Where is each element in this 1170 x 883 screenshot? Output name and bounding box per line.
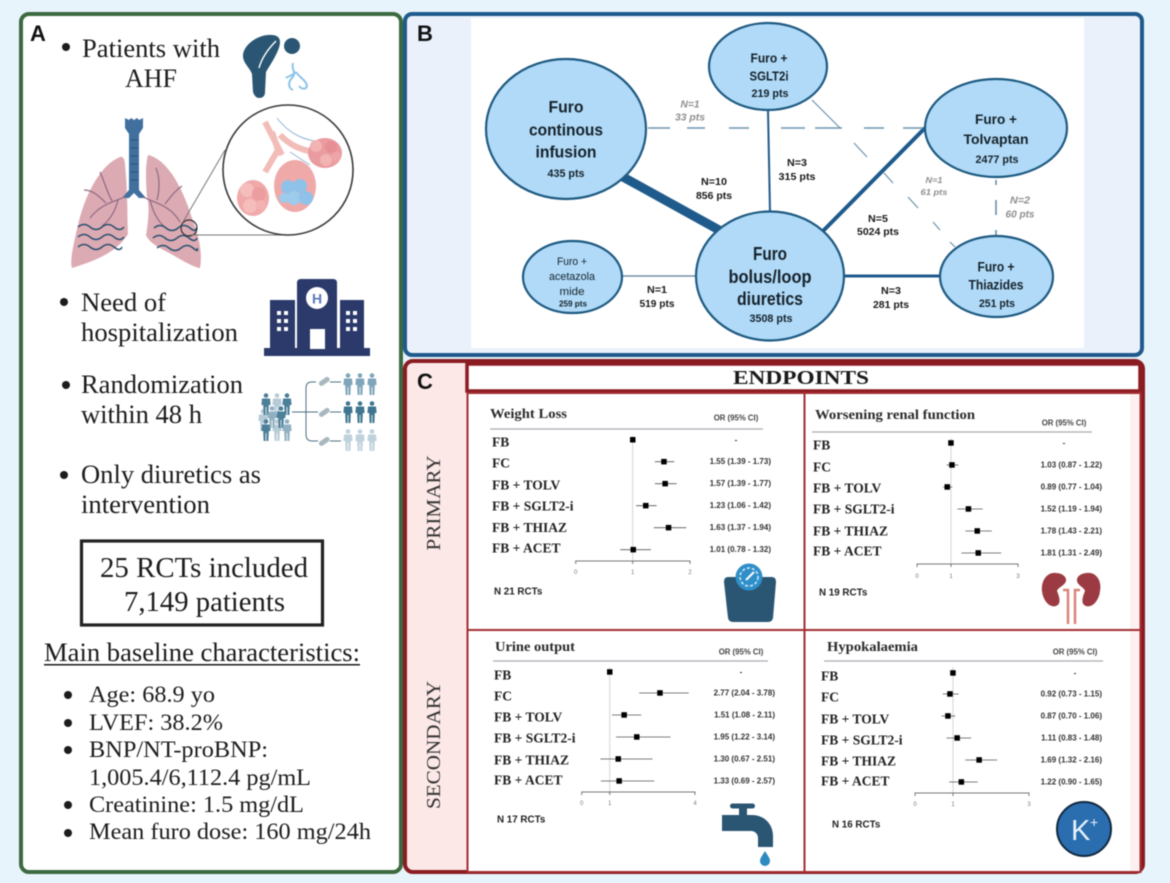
row: FB + SGLT2-i: FB + SGLT2-i [821,732,903,748]
node: furo continuous infusion: infusion [536,142,596,162]
edge labels: 519 pts [640,298,675,310]
list: baseline values [64,682,371,845]
icon: potassium K+: K [1071,815,1091,847]
row: FC [494,688,775,704]
row: FB + SGLT2-i: 1.95 (1.22 - 3.14) [714,732,775,742]
forest plot: weight loss: 2 [688,570,692,576]
node: furo plus tolvaptan [925,79,1067,177]
row: FB + SGLT2-i [494,730,775,746]
row: FB: - [1074,668,1077,678]
row: FC: FC [492,456,510,470]
node: furo continuous infusion: continous [529,120,603,140]
row: FB: FB [813,438,830,452]
row: FB + SGLT2-i: 1.11 (0.83 - 1.48) [1041,734,1102,742]
callout: included trials: 25 RCTs included [100,553,308,584]
node: furo plus acetazolamide [523,241,622,313]
panel B: treatment network [405,14,1142,355]
forest plot: worsening renal function: 0 [915,574,919,580]
forest plot: worsening renal function: 3 [1016,574,1020,580]
forest plot: urine output: OR (95% CI) [719,648,764,656]
edge labels: 61 pts [920,187,948,197]
edge labels: N=10 [701,176,727,188]
forest plot: weight loss: Weight Loss [490,407,568,422]
row: FB + TOLV: 0.87 (0.70 - 1.06) [1041,712,1102,720]
node: furo plus tolvaptan: 2477 pts [976,154,1018,166]
row: FB: FB [821,668,838,684]
row: FB [494,668,743,682]
node: furo continuous infusion: Furo [548,98,584,116]
forest plot: hypokalaemia: Hypokalaemia [827,640,918,655]
row: FB + ACET: 1.22 (0.90 - 1.65) [1041,778,1102,786]
row: FB: FB [494,668,511,682]
row: FB + SGLT2-i [821,732,1102,748]
callout: included trials: 7,149 patients [124,587,285,618]
row: FB + TOLV: FB + TOLV [813,480,881,496]
row: FB [821,668,1077,684]
row: FB + TOLV: FB + TOLV [821,712,889,726]
node: furo plus acetazolamide: Furo + [557,256,587,268]
row: FB + SGLT2-i: 1.52 (1.19 - 1.94) [1041,504,1102,514]
row: FB + SGLT2-i: FB + SGLT2-i [813,502,895,516]
node: furo plus acetazolamide: 259 pts [559,300,588,308]
bullet: randomization within 48 h: Randomization [81,370,243,399]
row: FB + TOLV [492,478,771,492]
row: FB + ACET [813,544,1102,558]
forest plot: urine output [468,630,804,872]
row: FC: FC [813,460,831,474]
edge labels [640,100,1035,311]
forest plot: hypokalaemia: OR (95% CI) [1053,648,1098,656]
row: FB + TOLV: FB + TOLV [494,710,562,724]
forest plot: hypokalaemia: 3 [1027,802,1031,808]
node: furo bolus loop diuretics: Furo [753,244,787,264]
note: trial count: N 16 RCTs [832,820,881,830]
row: FB + THIAZ: 1.78 (1.43 - 2.21) [1041,526,1102,536]
row: FB + THIAZ [821,754,1102,768]
bullet: need of hospitalization: hospitalization [81,318,238,347]
node: furo plus SGLT2i [709,23,827,110]
row: FB + THIAZ: FB + THIAZ [492,520,567,535]
forest plot: urine output: Urine output [495,640,575,655]
node: furo plus thiazides: Furo + [978,260,1015,274]
row: FB + THIAZ: FB + THIAZ [494,752,569,768]
row: FC: 1.03 (0.87 - 1.22) [1041,460,1102,470]
edge labels: N=2 [1010,196,1030,206]
illustration: alveoli magnified [223,105,353,235]
node: furo bolus loop diuretics: bolus/loop [728,267,812,287]
row: FB + THIAZ [494,752,775,768]
bullet: randomization within 48 h: within 48 h [81,400,202,429]
row: FC [821,690,1102,704]
bullet: patients with AHF: AHF [125,64,177,93]
row: FB + SGLT2-i: FB + SGLT2-i [494,730,576,746]
row: FB + THIAZ: FB + THIAZ [813,524,888,538]
forest plot: worsening renal function: 1 [949,574,953,580]
edge labels: 5024 pts [857,226,899,238]
row: FC: 2.77 (2.04 - 3.78) [714,688,775,698]
forest plot: urine output: 0 [580,801,584,807]
icon: randomization into arms [258,373,377,451]
row: FB + ACET: FB + ACET [821,774,889,788]
node: furo plus SGLT2i: SGLT2i [750,68,788,84]
edge labels: 315 pts [778,171,816,183]
note: trial count: N 17 RCTs [497,814,546,826]
row: FB + ACET: FB + ACET [492,540,560,556]
row: FB: FB [492,434,509,450]
edge labels: N=3 [881,285,901,297]
row: FB + ACET [492,540,771,556]
row: FB + THIAZ [492,520,771,535]
icon: coughing patient [243,35,307,98]
forest plot: worsening renal function [804,393,1140,630]
icon: potassium K+ [1057,802,1111,856]
list: baseline values: LVEF: 38.2% [89,710,223,736]
row: FB + ACET [821,774,1102,788]
illustration: lungs with pulmonary oedema [71,118,285,268]
edge labels: N=3 [787,157,807,169]
panel letter B: B [417,21,433,46]
row: FB: - [735,436,738,444]
row: FB + ACET: 1.81 (1.31 - 2.49) [1041,548,1102,558]
icon: hospital [264,279,370,356]
row: FB + SGLT2-i [813,502,1102,516]
panel letter A: A [30,21,46,46]
bullet: patients with AHF [62,34,220,93]
bullet: only diuretics as intervention: Only diuretics as [81,460,261,489]
row: FB: - [740,668,743,676]
heading: baseline characteristics: Main baseline characteristics: [44,637,360,667]
forest plot: worsening renal function: OR (95% CI) [1042,418,1087,428]
row label: primary: PRIMARY [423,456,445,550]
row: FB + SGLT2-i: 1.23 (1.06 - 1.42) [710,501,771,510]
row: FB + TOLV: 0.89 (0.77 - 1.04) [1041,482,1102,492]
node: furo plus thiazides: 251 pts [979,298,1015,310]
node: furo plus tolvaptan: Furo + [975,111,1017,127]
bullet: only diuretics as intervention [60,460,261,519]
bullet: need of hospitalization [60,288,238,347]
list: baseline values: Creatinine: 1.5 mg/dL [89,792,304,818]
node: furo plus SGLT2i: 219 pts [752,88,788,100]
row: FC: 0.92 (0.73 - 1.15) [1041,690,1102,698]
row: FB + TOLV: 1.57 (1.39 - 1.77) [710,479,771,488]
row: FC: 1.55 (1.39 - 1.73) [710,457,771,466]
list: baseline values: Mean furo dose: 160 mg/24h [89,819,371,845]
node: furo plus thiazides: Thiazides [968,278,1024,292]
row: FB + ACET [494,772,775,788]
callout: included trials [82,541,322,625]
row: FB [492,434,738,450]
panel A: population [21,14,401,872]
node: furo bolus loop diuretics [696,212,844,340]
row: FB + SGLT2-i [492,498,771,514]
row: FB + TOLV: FB + TOLV [492,478,560,492]
row: FB + TOLV [821,712,1102,726]
node: furo plus SGLT2i: Furo + [750,50,788,66]
forest plot: weight loss [468,393,804,630]
node: furo continuous infusion [486,59,646,199]
edge labels: 856 pts [696,190,732,202]
row label: secondary: SECONDARY [423,681,445,809]
row: FB + TOLV: 1.51 (1.08 - 2.11) [714,710,775,720]
forest plot: weight loss: 1 [631,570,635,576]
panel C: endpoints [405,361,1143,872]
icon: kidneys [1042,573,1100,624]
edge labels: 60 pts [1006,210,1035,220]
title: endpoints: ENDPOINTS [733,367,869,389]
edge labels: 33 pts [675,112,705,124]
row: FC [492,456,771,470]
forest plot: worsening renal function: Worsening renal function [815,408,975,423]
node: furo plus acetazolamide: acetazola [549,271,596,283]
row: FB + SGLT2-i: FB + SGLT2-i [492,498,574,514]
edge labels: N=5 [868,213,888,225]
node: furo plus thiazides [940,236,1053,317]
panel letter C: C [417,369,433,394]
edge labels: N=1 [926,175,943,185]
list: baseline values: Age: 68.9 yo [89,682,215,708]
row: FB + ACET: 1.01 (0.78 - 1.32) [710,545,771,554]
forest plot: hypokalaemia: 0 [913,802,917,808]
row: FB + THIAZ: 1.63 (1.37 - 1.94) [710,523,771,532]
note: trial count: N 19 RCTs [819,588,868,598]
row: FB + ACET: FB + ACET [494,772,562,788]
row: FB + THIAZ: 1.69 (1.32 - 2.16) [1041,756,1102,764]
forest plot: urine output: 4 [693,801,697,807]
row: FB + ACET: FB + ACET [813,544,881,558]
list: baseline values: 1,005.4/6,112.4 pg/mL [89,765,311,791]
network edges [622,100,996,276]
row: FB [813,438,1066,452]
icon: dripping tap [722,804,773,866]
bullet: randomization within 48 h [62,370,243,429]
bullet: need of hospitalization: Need of [81,288,166,317]
forest plot: weight loss: OR (95% CI) [714,414,759,422]
forest plot: hypokalaemia [804,630,1140,872]
row: FC: FC [821,690,839,704]
note: trial count: N 21 RCTs [494,586,543,598]
forest plot: urine output: 1 [608,801,612,807]
row: FC [813,460,1102,474]
row: FB + TOLV [813,480,1102,496]
row: FB + THIAZ: FB + THIAZ [821,754,896,768]
row: FB + TOLV [494,710,775,724]
forest plot: weight loss: 0 [574,570,578,576]
bullet: only diuretics as intervention: intervention [81,490,210,519]
node: furo bolus loop diuretics: 3508 pts [750,313,792,325]
forest plot: hypokalaemia: 1 [951,802,955,808]
row: FB + THIAZ [813,524,1102,538]
node: furo plus acetazolamide: mide [560,286,584,298]
row: FB + THIAZ: 1.30 (0.67 - 2.51) [714,754,775,764]
row: FC: FC [494,688,512,704]
row: FB + ACET: 1.33 (0.69 - 2.57) [714,776,775,786]
node: furo bolus loop diuretics: diuretics [737,289,803,309]
edge labels: N=1 [647,284,667,296]
edge labels: N=1 [680,100,700,110]
bullet: patients with AHF: Patients with [82,34,220,63]
node: furo plus tolvaptan: Tolvaptan [964,131,1028,147]
row: FB: - [1063,438,1066,448]
icon: hospital: H [312,290,322,306]
edge labels: 281 pts [873,299,909,311]
icon: weighing scale [724,564,776,622]
node: furo continuous infusion: 435 pts [548,168,584,180]
list: baseline values: BNP/NT-proBNP: [89,737,268,763]
title: endpoints [467,364,1140,391]
icon: potassium K+: + [1090,814,1098,830]
